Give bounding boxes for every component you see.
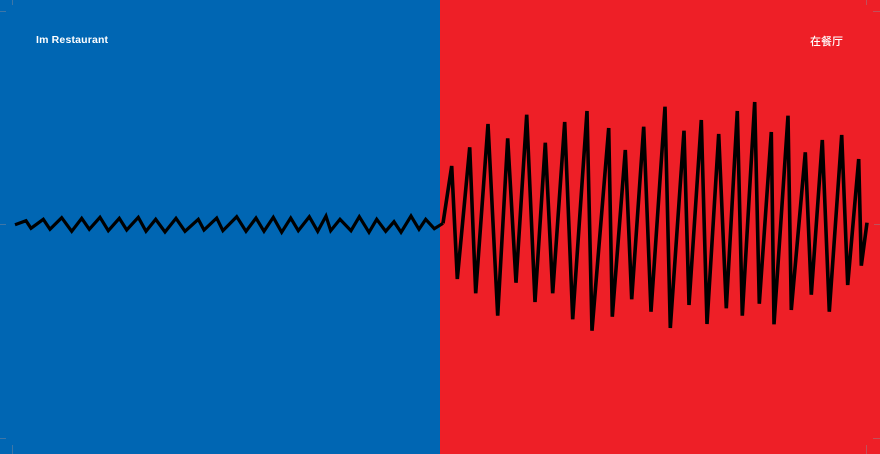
line: loud spikes on red — [443, 102, 867, 331]
heading: Im Restaurant: Im Restaurant — [36, 34, 108, 46]
heading: 在餐厅: 在餐厅 — [810, 36, 843, 48]
line: calm zigzag on blue — [15, 216, 443, 232]
panel: blue restaurant side — [0, 0, 440, 454]
panel: red restaurant side — [440, 0, 880, 454]
